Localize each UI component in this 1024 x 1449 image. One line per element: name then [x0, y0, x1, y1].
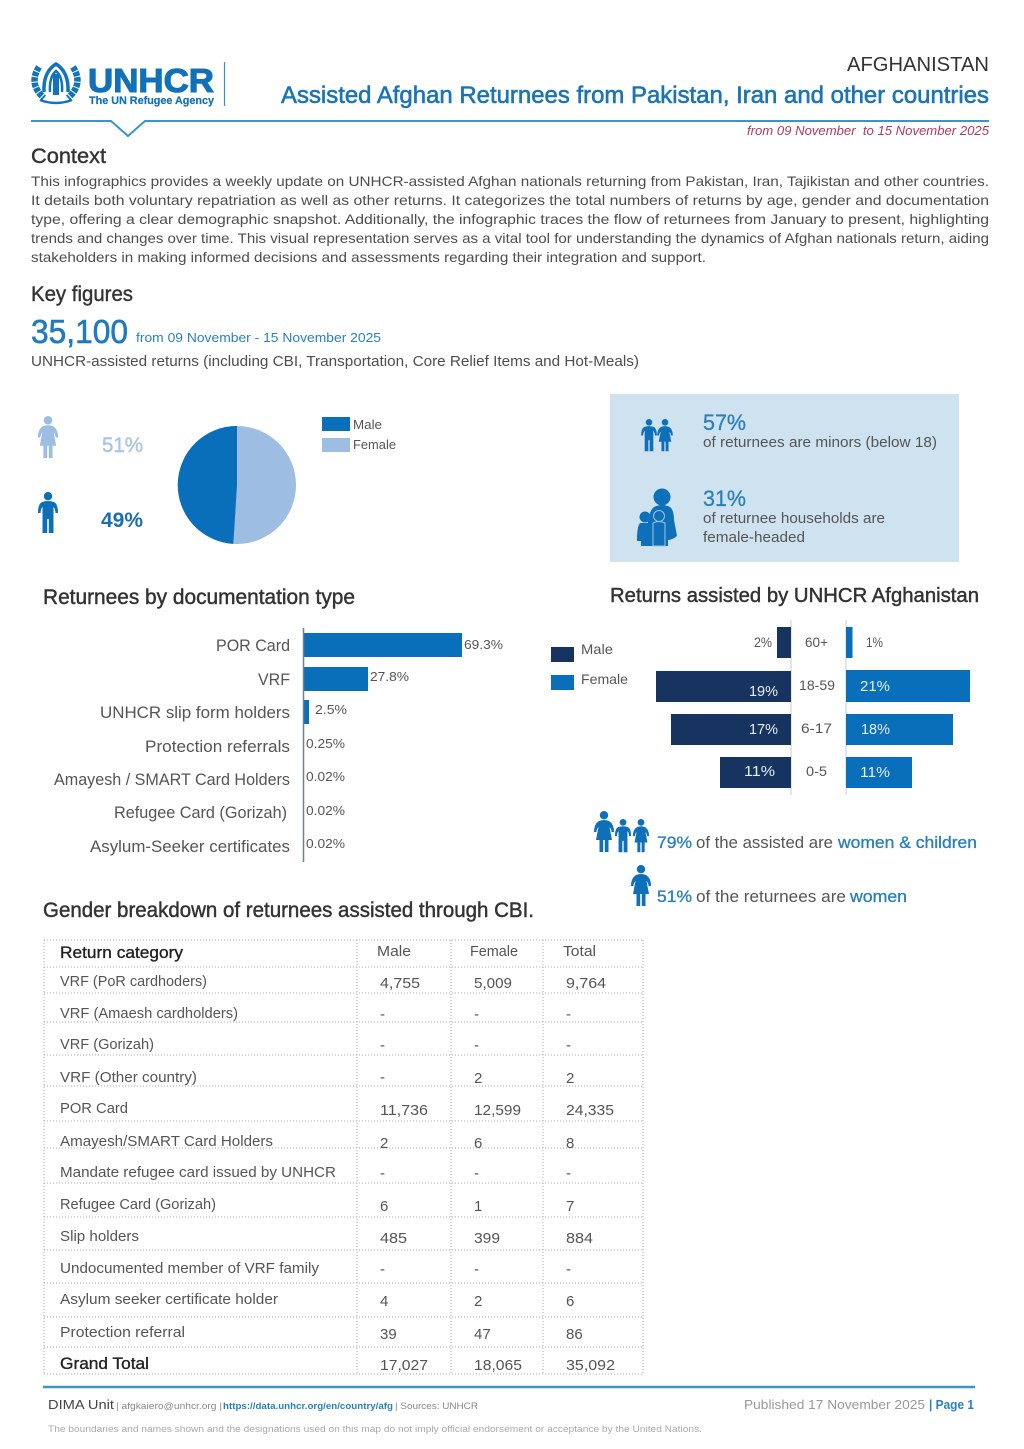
footer credits: DIMA Unit	[48, 1397, 114, 1412]
table values: 47	[474, 1326, 491, 1343]
table row labels: Asylum seeker certificate holder	[60, 1291, 278, 1308]
disclaimer: The boundaries and names shown and the designations used on this map do not imply official endorsement or acceptance by the United Nations.	[48, 1424, 702, 1435]
female percentage: 51%	[102, 434, 143, 457]
chart legend: age pyramid: Male	[581, 641, 613, 657]
female-headed description: female-headed	[703, 530, 805, 546]
context paragraph: This infographics provides a weekly update on UNHCR-assisted Afghan nationals returning from Pakistan, Iran, Tajikistan and other countries.	[31, 173, 989, 189]
heading: returns assisted: Returns assisted by UNHCR Afghanistan	[610, 584, 979, 607]
table values: -	[566, 1006, 571, 1023]
table values: -	[380, 1261, 385, 1278]
table row labels: Refugee Card (Gorizah)	[60, 1196, 216, 1213]
population pyramid chart: 0-5	[806, 763, 827, 779]
context heading: Context	[31, 145, 106, 168]
table values	[380, 975, 615, 1374]
publication date and page: Published 17 November 2025	[744, 1397, 925, 1412]
table header: Female	[470, 943, 518, 960]
table values: 7	[566, 1198, 574, 1215]
date range: from 09 November to 15 November 2025	[747, 123, 990, 138]
footer credits	[48, 1397, 479, 1412]
table values: 6	[380, 1198, 388, 1215]
heading: documentation type: Returnees by documentation type	[43, 585, 355, 609]
chart legend: age pyramid	[551, 641, 628, 690]
callout: women share: of the returnees are	[696, 887, 846, 906]
logo tagline: The UN Refugee Agency	[89, 95, 215, 107]
bar chart: documentation type	[54, 628, 503, 862]
table values: 86	[566, 1326, 583, 1343]
table row labels: Undocumented member of VRF family	[60, 1260, 319, 1277]
pie legend: Male	[353, 417, 382, 432]
logo wordmark: UNHCR	[88, 62, 214, 99]
panel: gender split	[38, 416, 396, 544]
population pyramid chart	[656, 620, 970, 795]
population pyramid chart: 11%	[744, 763, 775, 780]
title: Assisted Afghan Returnees from Pakistan, Iran and other countries	[281, 82, 989, 109]
key figure: total returns: 35,100	[31, 313, 128, 350]
context paragraph	[31, 173, 989, 265]
table header	[60, 943, 596, 962]
table values: 399	[474, 1230, 500, 1247]
panel: minors and female-headed households	[610, 394, 959, 562]
male percentage: 49%	[101, 509, 143, 532]
icon: UNHCR laurel emblem	[35, 64, 77, 103]
minors percentage: 57%	[703, 410, 746, 435]
bar chart: documentation type: UNHCR slip form holders	[100, 703, 290, 722]
footer	[43, 1387, 975, 1435]
table values: 485	[380, 1230, 407, 1247]
population pyramid chart: 21%	[860, 678, 890, 695]
table values: 2	[474, 1070, 482, 1087]
female-headed description	[703, 511, 885, 546]
table row labels: VRF (Amaesh cardholders)	[60, 1005, 238, 1022]
table values: 4,755	[380, 975, 420, 992]
table row labels: Slip holders	[60, 1228, 139, 1245]
table row labels: POR Card	[60, 1100, 128, 1117]
table values: 12,599	[474, 1102, 521, 1119]
table values: -	[566, 1165, 571, 1182]
table values: -	[380, 1069, 385, 1086]
population pyramid chart: 2%	[754, 634, 772, 650]
table values: -	[380, 1006, 385, 1023]
context paragraph: trends and changes over time. This visual representation serves as a vital tool for understanding the dynamics of Afghan nationals return, aiding	[31, 230, 989, 246]
minors description: of returnees are minors (below 18)	[703, 435, 937, 451]
table values: -	[566, 1261, 571, 1278]
icon: woman	[631, 865, 651, 906]
table values: 9,764	[566, 975, 606, 992]
bar chart: documentation type: 0.02%	[306, 836, 345, 851]
table values: 35,092	[566, 1357, 615, 1374]
table values: 2	[566, 1070, 574, 1087]
bar chart: documentation type: Protection referrals	[145, 737, 290, 756]
table values: -	[380, 1037, 385, 1054]
key figure description: UNHCR-assisted returns (including CBI, Transportation, Core Relief Items and Hot-Meals)	[31, 353, 639, 370]
icon: woman and two children	[594, 811, 649, 852]
table: gender breakdown	[44, 940, 643, 1374]
pie legend: Female	[353, 437, 396, 452]
pie chart	[178, 426, 296, 544]
table values: 4	[380, 1293, 388, 1310]
icon: mother with children	[637, 488, 677, 546]
population pyramid chart: 18-59	[799, 677, 835, 693]
callout: women and children: 79%	[657, 833, 692, 852]
table row labels: Mandate refugee card issued by UNHCR	[60, 1164, 336, 1181]
footer credits: | Sources: UNHCR	[395, 1401, 479, 1411]
table values: 39	[380, 1326, 397, 1343]
table values: 2	[474, 1293, 482, 1310]
bar chart: documentation type: 0.02%	[306, 769, 345, 784]
bar chart: documentation type: 0.25%	[306, 736, 345, 751]
icon: female	[38, 416, 58, 458]
bar chart: documentation type: Refugee Card (Gorizah)	[114, 803, 287, 822]
table values: 18,065	[474, 1357, 522, 1374]
context paragraph: It details both voluntary repatriation as well as other returns. It categorizes the total numbers of returns by age, gender and documentation	[31, 192, 989, 208]
bar chart: documentation type: Asylum-Seeker certificates	[90, 837, 290, 856]
pie legend	[322, 417, 396, 452]
table values: 6	[474, 1135, 482, 1152]
table values: 6	[566, 1293, 574, 1310]
chart legend: age pyramid: Female	[581, 671, 628, 687]
table values: -	[380, 1165, 385, 1182]
table values: -	[474, 1037, 479, 1054]
table row labels: VRF (Gorizah)	[60, 1036, 154, 1053]
population pyramid chart: 17%	[749, 721, 778, 738]
heading: CBI gender breakdown: Gender breakdown of returnees assisted through CBI.	[43, 898, 534, 922]
population pyramid chart: 60+	[805, 634, 828, 650]
context paragraph: type, offering a clear demographic snapshot. Additionally, the infographic traces the flow of returnees from January to present, highlighting	[31, 211, 989, 227]
bar chart: documentation type: 69.3%	[464, 637, 503, 652]
table values: 8	[566, 1135, 574, 1152]
population pyramid chart: 18%	[861, 721, 890, 738]
bar chart: documentation type: Amayesh / SMART Card Holders	[54, 770, 290, 789]
table values: 1	[474, 1198, 482, 1215]
publication date and page: | Page 1	[929, 1397, 974, 1412]
table values: 24,335	[566, 1102, 614, 1119]
key figure date range: from 09 November - 15 November 2025	[136, 330, 381, 345]
callout: women share	[631, 865, 907, 906]
table values: 2	[380, 1135, 388, 1152]
table row labels: Amayesh/SMART Card Holders	[60, 1133, 273, 1150]
table header: Return category	[60, 943, 184, 962]
table header: Male	[377, 943, 411, 960]
female-headed percentage: 31%	[703, 486, 746, 511]
female-headed description: of returnee households are	[703, 511, 885, 527]
table values: -	[474, 1261, 479, 1278]
country heading: AFGHANISTAN	[847, 53, 989, 76]
table values: -	[474, 1165, 479, 1182]
population pyramid chart: 19%	[749, 683, 778, 700]
table values: 11,736	[380, 1102, 428, 1119]
callout: women and children	[594, 811, 977, 852]
table header: Total	[563, 943, 596, 960]
table values: -	[474, 1006, 479, 1023]
table row labels	[60, 973, 336, 1373]
icon: two children	[641, 419, 673, 451]
callout: women share: women	[849, 887, 907, 906]
table values: 17,027	[380, 1357, 428, 1374]
table row labels: VRF (PoR cardhoders)	[60, 973, 207, 990]
bar chart: documentation type: POR Card	[216, 636, 290, 655]
table values: 5,009	[474, 975, 512, 992]
table row labels: Protection referral	[60, 1324, 185, 1341]
table values: -	[566, 1037, 571, 1054]
callout: women share: 51%	[657, 887, 692, 906]
key figures heading: Key figures	[31, 283, 133, 306]
header: UNHCR logo	[35, 62, 224, 107]
bar chart: documentation type: VRF	[258, 670, 290, 689]
table row labels: Grand Total	[60, 1354, 149, 1373]
header rule with chevron	[31, 121, 989, 136]
footer credits: https://data.unhcr.org/en/country/afg	[223, 1401, 393, 1411]
bar chart: documentation type: 0.02%	[306, 803, 345, 818]
callout: women and children: of the assisted are	[696, 833, 833, 852]
context paragraph: stakeholders in making informed decisions and assessments regarding their integration and support.	[31, 249, 706, 265]
population pyramid chart: 6-17	[801, 720, 832, 736]
icon: male	[38, 492, 58, 533]
table values: 884	[566, 1230, 593, 1247]
population pyramid chart: 1%	[866, 634, 883, 650]
bar chart: documentation type: 2.5%	[315, 702, 347, 717]
bar chart: documentation type: 27.8%	[370, 669, 409, 684]
table row labels: VRF (Other country)	[60, 1069, 197, 1086]
population pyramid chart: 11%	[860, 764, 890, 781]
callout: women and children: women & children	[837, 833, 977, 852]
footer credits: | afgkaiero@unhcr.org |	[116, 1401, 222, 1411]
